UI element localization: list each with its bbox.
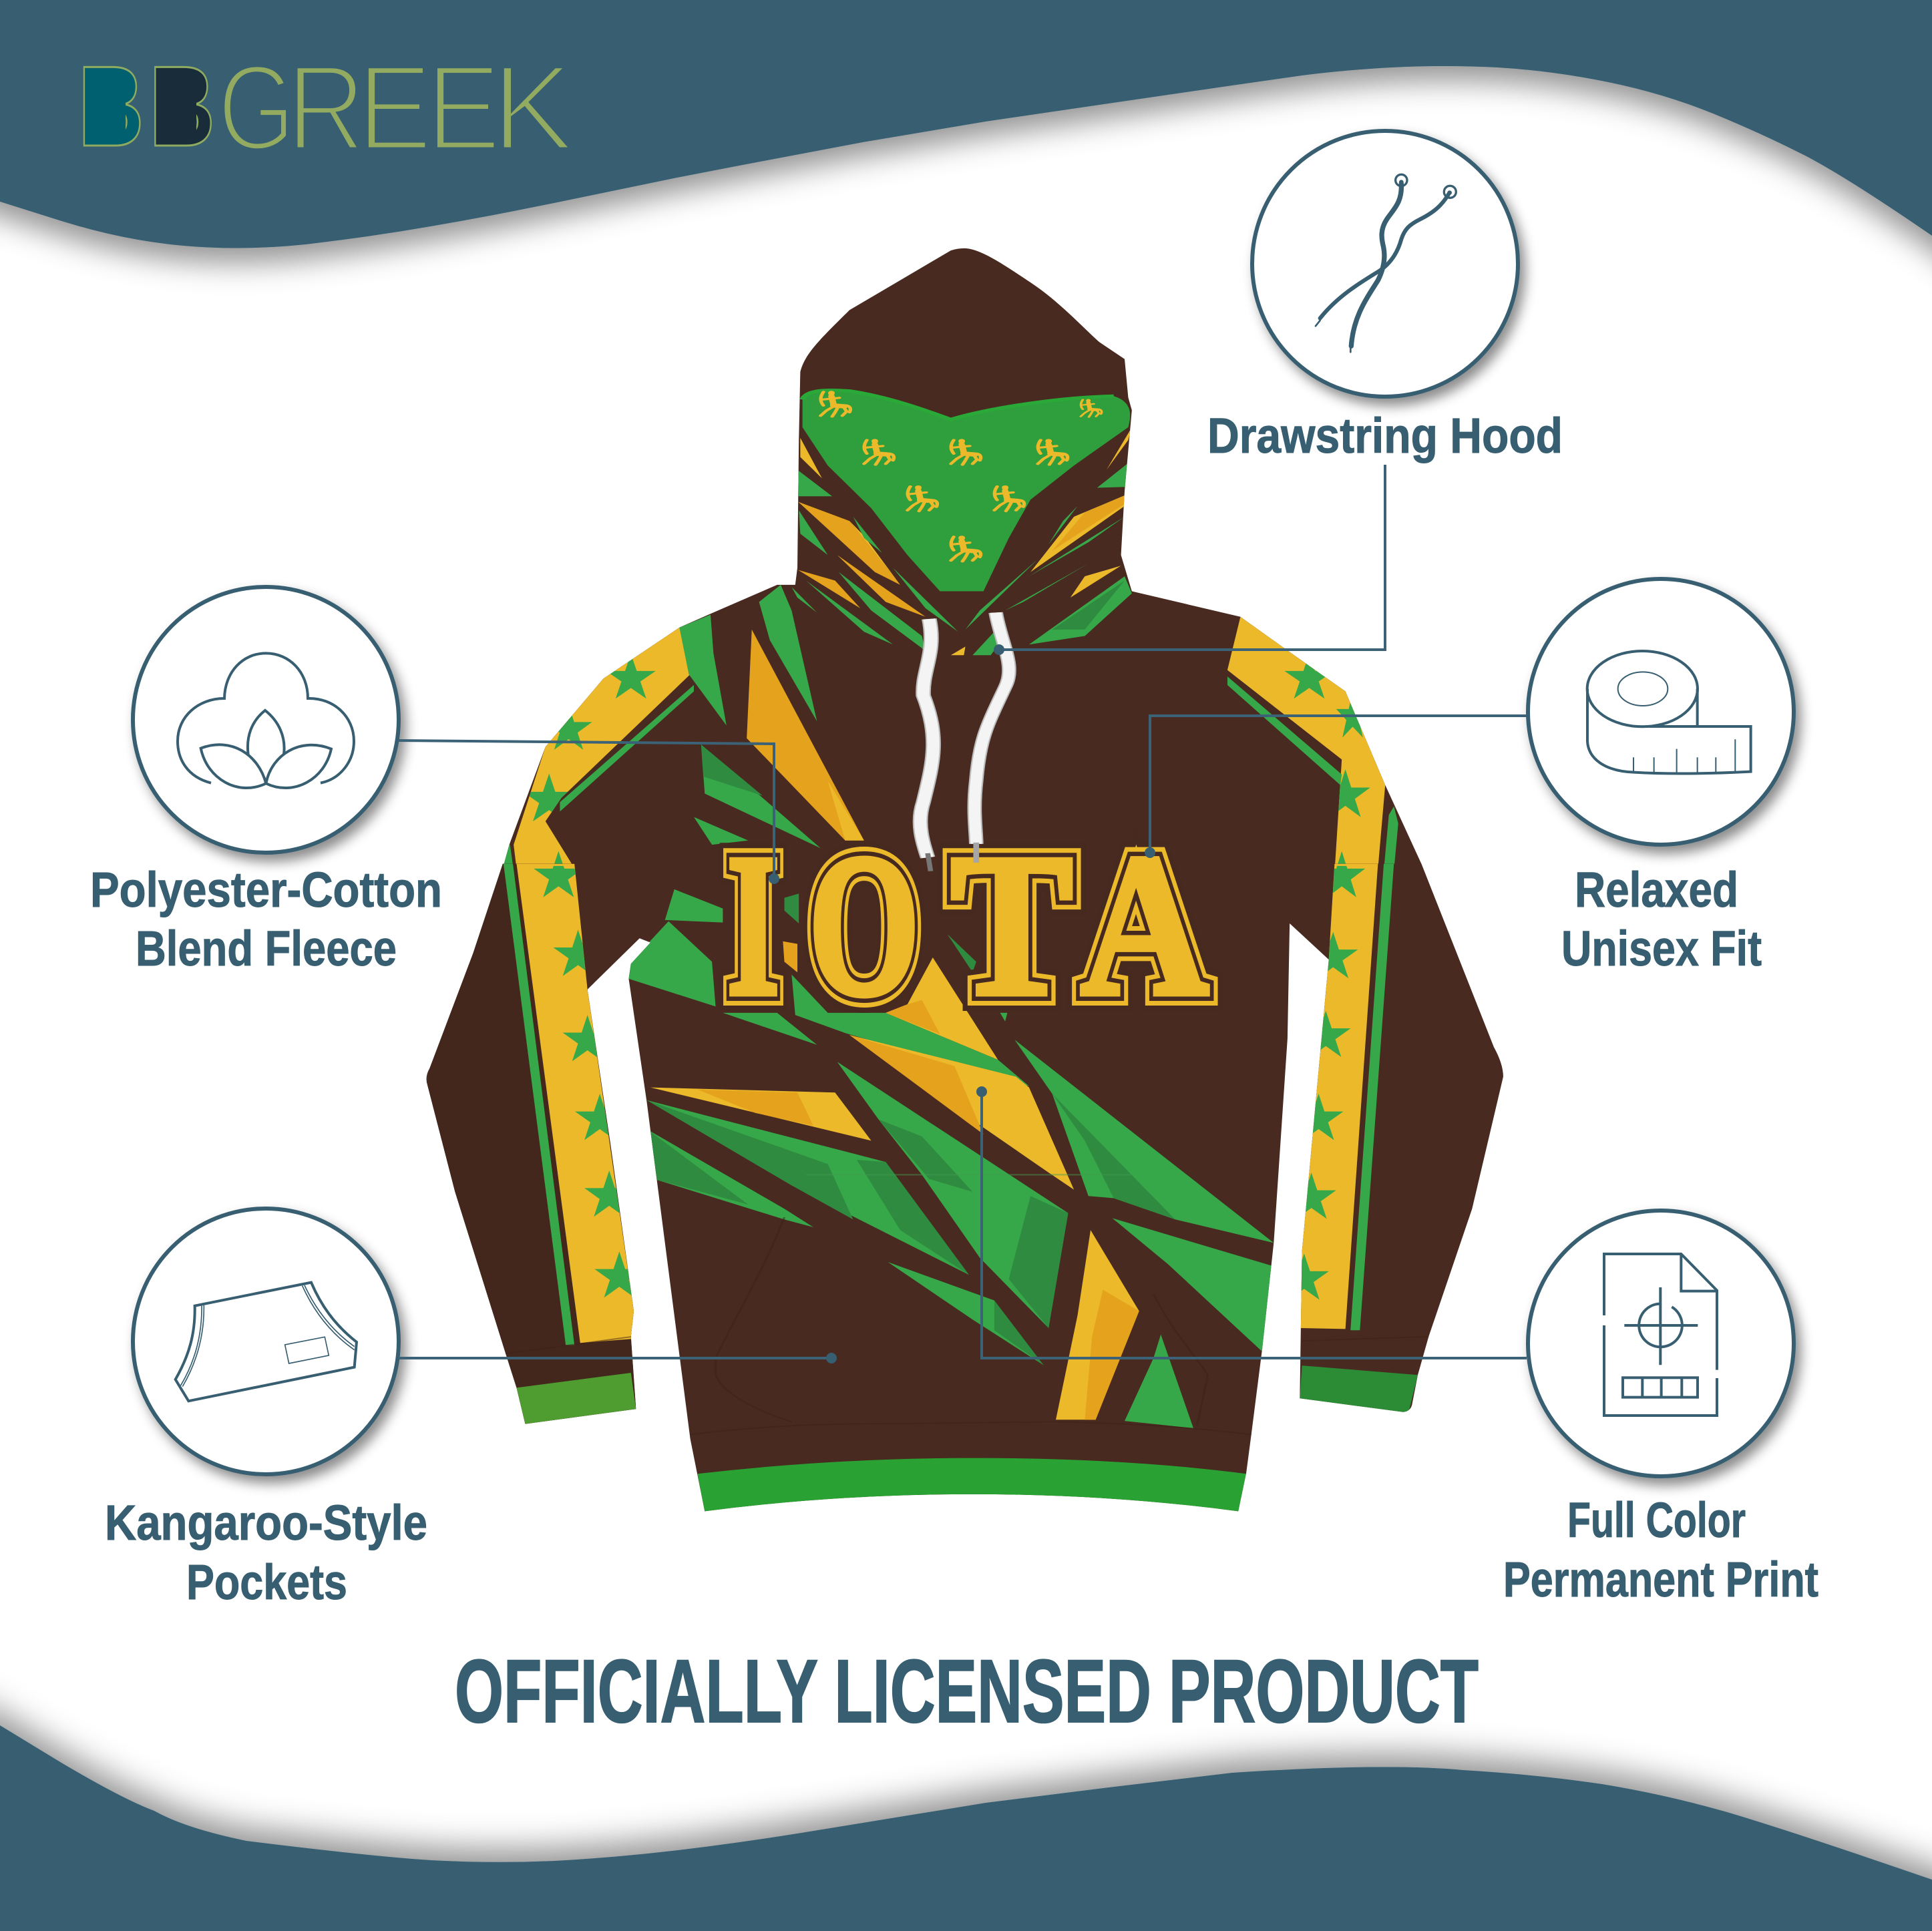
letter O: O	[809, 812, 920, 1038]
left sleeve shade	[427, 864, 636, 1424]
body graphic orange left shard	[650, 1088, 872, 1140]
logo: BB Greek	[78, 39, 574, 176]
body graphic right lower green	[1113, 1218, 1274, 1351]
label: Unisex Fit	[1561, 921, 1762, 976]
logo: BB Greek: K	[492, 40, 574, 176]
letter T: T	[950, 812, 1073, 1038]
icon: cotton boll	[178, 653, 354, 788]
left forearm stars	[534, 851, 644, 1297]
leader line	[982, 1092, 1527, 1358]
letter O: O	[809, 812, 920, 1038]
anchor dot	[994, 644, 1004, 655]
logo: BB Greek: R	[286, 39, 365, 176]
label: Relaxed	[1575, 862, 1738, 917]
label: Polyester-Cotton	[90, 862, 442, 917]
callout: full color print	[976, 1086, 1818, 1607]
circle	[1528, 579, 1794, 845]
callout: polyester-cotton	[90, 587, 779, 976]
body graphic green sash	[647, 1100, 969, 1275]
icon: drawstrings	[1316, 174, 1456, 352]
small shards near letters	[947, 934, 976, 972]
hoodie lower: body, sleeves, pockets	[427, 851, 1503, 1512]
letter I: I	[727, 813, 780, 1038]
letter I: I	[727, 813, 780, 1038]
drawstrings	[920, 612, 1009, 871]
anchor dot	[1145, 847, 1155, 858]
callout: relaxed fit	[1145, 579, 1794, 976]
label: Full Color	[1567, 1492, 1746, 1548]
label: Permanent Print	[1503, 1552, 1818, 1607]
left sleeve green stripe	[504, 845, 513, 864]
left chest stripe	[759, 585, 817, 721]
body graphic bottom green	[1125, 1335, 1193, 1428]
chest green dark	[701, 744, 763, 796]
circle	[133, 1209, 399, 1474]
pocket and hem seams	[506, 1174, 1428, 1435]
hood lower stripes	[791, 427, 1132, 655]
letter T: T	[950, 812, 1073, 1038]
left sleeve green stripe	[504, 864, 574, 1345]
left sleeve gold	[516, 864, 634, 1343]
centaur pattern	[821, 392, 1102, 562]
callout: drawstring hood	[994, 131, 1563, 655]
right shoulder stars	[1284, 654, 1370, 897]
label	[90, 862, 442, 976]
leader line	[399, 1357, 831, 1359]
body graphic small green	[888, 1262, 1044, 1365]
logo: BB Greek: G	[218, 40, 295, 176]
body graphic green upper left	[665, 889, 723, 923]
label: Pockets	[186, 1554, 347, 1610]
left shoulder stars	[523, 654, 656, 897]
leader line	[999, 465, 1385, 650]
letter T: T	[950, 812, 1073, 1038]
heading: officially licensed product: OFFICIALLY LICENSED PRODUCT	[455, 1642, 1479, 1741]
icon: measuring tape	[1587, 651, 1751, 773]
hood lining	[803, 390, 1130, 591]
anchor dot	[826, 1353, 837, 1363]
chest gold edge	[828, 781, 864, 841]
label	[1561, 862, 1762, 976]
right sleeve stripe top	[1227, 676, 1342, 785]
icon: print file	[1604, 1254, 1717, 1416]
chest green small	[694, 817, 748, 845]
logo: BB Greek: B	[78, 42, 144, 170]
body graphic lower gold	[1056, 1230, 1139, 1420]
letter O: O	[809, 812, 920, 1038]
hem band	[697, 1458, 1246, 1512]
letter A: A	[1081, 812, 1209, 1038]
letter O: O	[809, 812, 920, 1038]
logo: BB Greek: B	[149, 42, 215, 170]
hood lining seam	[803, 390, 1114, 419]
body graphic green lower left	[648, 1130, 813, 1227]
label: Blend Fleece	[136, 921, 397, 976]
logo: BB Greek: E	[426, 41, 501, 176]
IOTA varsity lettering	[727, 812, 1209, 1038]
body graphic gold shards	[886, 957, 998, 1060]
right sleeve green stripe	[1350, 864, 1394, 1330]
callout: kangaroo pockets	[105, 1209, 837, 1610]
circle	[133, 587, 399, 853]
body graphic central green	[837, 1062, 1068, 1328]
right drawstring	[974, 612, 1009, 863]
left shoulder green	[679, 615, 727, 725]
letter I: I	[727, 813, 780, 1038]
letter I: I	[727, 813, 780, 1038]
left shoulder band	[514, 628, 689, 864]
letter T: T	[950, 812, 1073, 1038]
leader line	[399, 740, 774, 879]
right sleeve gold	[1300, 864, 1378, 1329]
letter A: A	[1081, 812, 1209, 1038]
left drawstring	[920, 619, 934, 871]
logo: BB Greek: E	[357, 41, 432, 176]
left sleeve stripe top	[560, 685, 694, 811]
hoodie upper: hood, shoulders, chest	[495, 248, 1426, 897]
top wave band	[0, 0, 1932, 267]
letter A: A	[1081, 812, 1209, 1038]
left cuff	[516, 1373, 636, 1424]
leader line	[1150, 716, 1527, 853]
chest orange	[747, 630, 864, 841]
right sleeve green stripe	[1384, 807, 1398, 870]
body graphic central green band	[791, 975, 1029, 1086]
right forearm stars	[1280, 851, 1365, 1300]
icon: pocket	[176, 1283, 357, 1401]
right shoulder band	[1227, 617, 1385, 895]
letter A: A	[1081, 812, 1209, 1038]
label	[105, 1495, 427, 1610]
label	[1503, 1492, 1818, 1607]
chest green	[701, 744, 821, 848]
circle	[1252, 131, 1518, 397]
body graphic right green	[1014, 1040, 1274, 1243]
right cuff	[1300, 1365, 1418, 1414]
hoodie	[427, 248, 1503, 1512]
circle	[1528, 1211, 1794, 1476]
label: Drawstring Hood	[1207, 408, 1563, 463]
anchor dot	[976, 1086, 987, 1097]
label: Kangaroo-Style	[105, 1495, 427, 1550]
anchor dot	[769, 873, 779, 884]
bottom wave band	[0, 1709, 1932, 1931]
